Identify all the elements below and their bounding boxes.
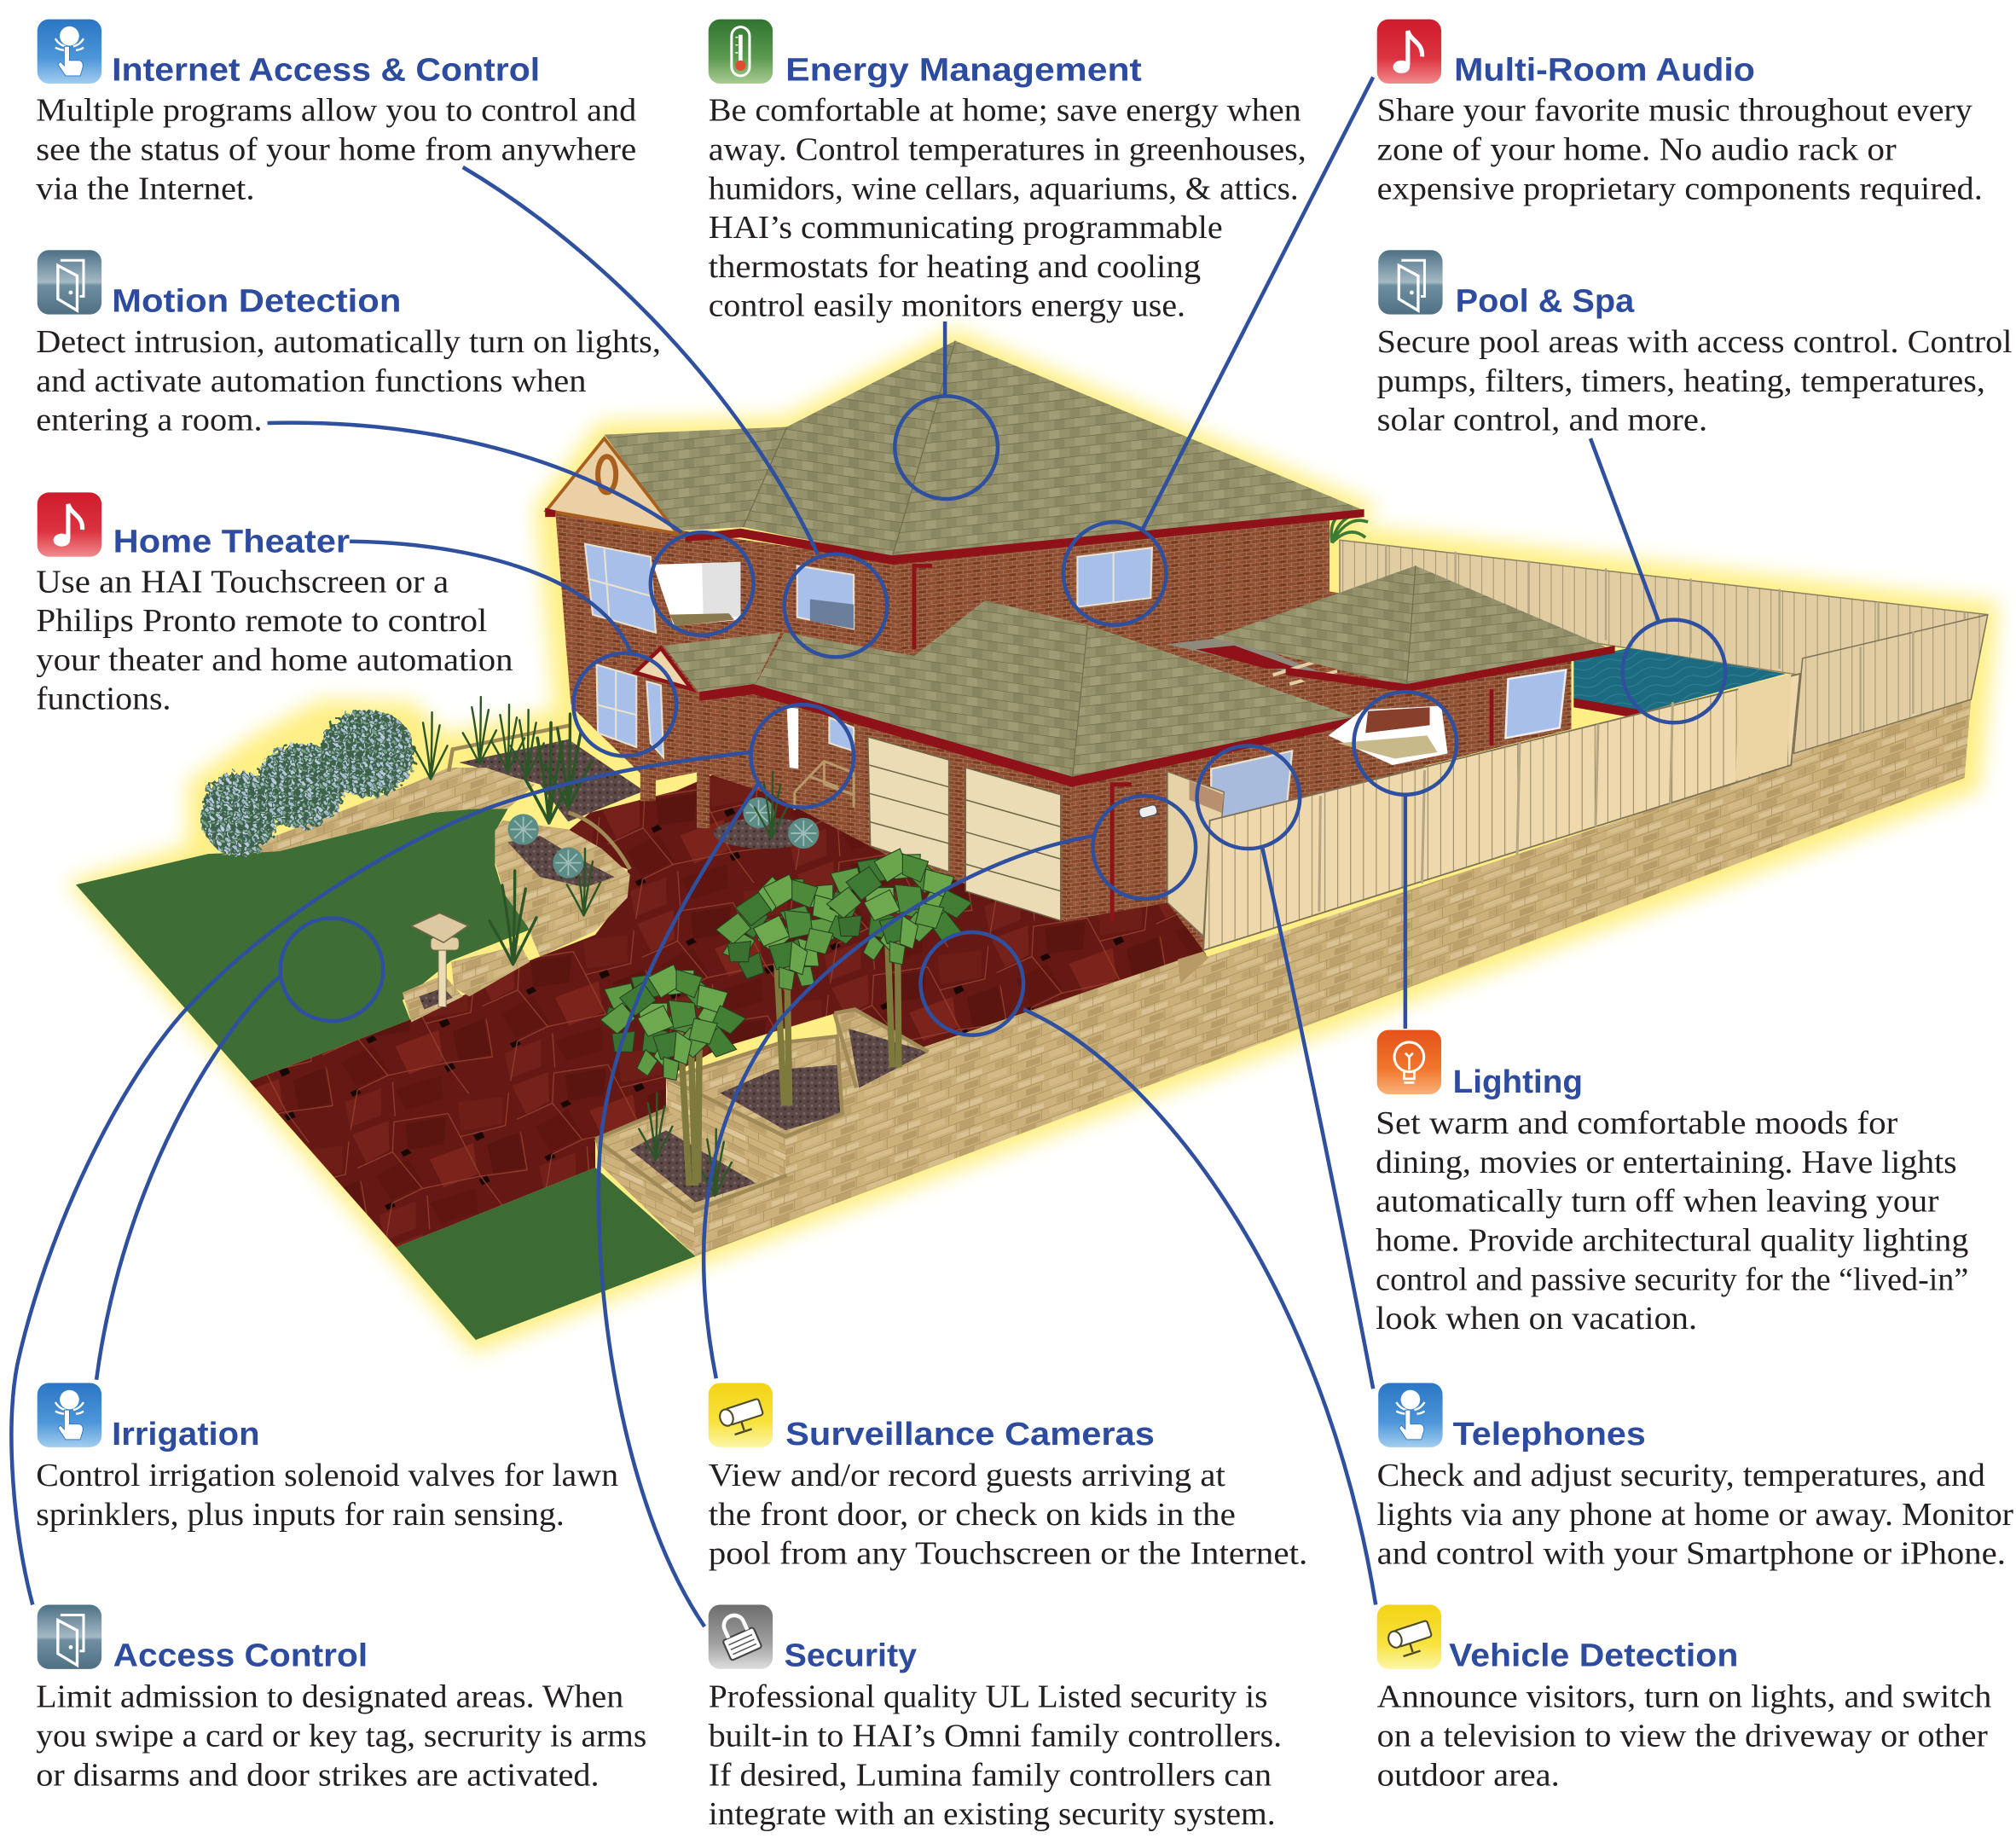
panel: Security bbox=[709, 1605, 1282, 1832]
heading: Telephones bbox=[1453, 1416, 1646, 1452]
text block: entering a room. bbox=[36, 402, 263, 438]
front fence bbox=[1203, 674, 1800, 950]
heading: Irrigation bbox=[112, 1416, 260, 1452]
heading: Surveillance Cameras bbox=[785, 1416, 1155, 1452]
panel: Energy Management bbox=[709, 20, 1306, 324]
heading: Access Control bbox=[113, 1637, 368, 1673]
heading: Motion Detection bbox=[112, 283, 401, 320]
cutaway room upper bbox=[653, 562, 740, 626]
panel: Irrigation bbox=[36, 1383, 618, 1533]
text block: zone of your home. No audio rack or bbox=[1377, 132, 1897, 168]
line: home theater bbox=[350, 542, 631, 654]
text block: Professional quality UL Listed security is bbox=[709, 1679, 1268, 1714]
text block: Use an HAI Touchscreen or a bbox=[36, 564, 449, 600]
ring: vehicle bbox=[920, 932, 1023, 1035]
icon: thermometer bbox=[709, 20, 773, 84]
panel: Surveillance Cameras bbox=[709, 1383, 1307, 1572]
text block: and activate automation functions when bbox=[36, 363, 586, 399]
gate bbox=[1167, 772, 1224, 936]
line: vehicle detection bbox=[1023, 1009, 1376, 1605]
heading: Security bbox=[785, 1637, 918, 1673]
panel: Internet Access and Control bbox=[36, 20, 636, 206]
ring: pool bbox=[1623, 620, 1725, 722]
lower house walls bbox=[565, 643, 1343, 920]
icon: light bulb bbox=[1377, 1030, 1441, 1094]
text block: HAI’s communicating programmable bbox=[709, 210, 1223, 246]
text block: the front door, or check on kids in the bbox=[709, 1497, 1236, 1533]
text block bbox=[36, 93, 636, 206]
ring: irrigation bbox=[281, 918, 383, 1021]
line: telephones bbox=[1263, 849, 1373, 1389]
garden plants bbox=[414, 697, 732, 1196]
text block: humidors, wine cellars, aquariums, & attics. bbox=[709, 171, 1299, 206]
pavilion walls bbox=[1286, 659, 1571, 772]
text block bbox=[709, 1458, 1307, 1572]
text block: solar control, and more. bbox=[1377, 402, 1707, 438]
panel: Motion Detection bbox=[36, 250, 661, 438]
icon: touch hand bbox=[38, 20, 101, 84]
garage doors bbox=[868, 737, 1061, 920]
ring: security and access bbox=[750, 704, 854, 808]
line: motion detection bbox=[268, 423, 681, 532]
text block: via the Internet. bbox=[36, 171, 255, 206]
icon: camera bbox=[709, 1383, 773, 1447]
text block bbox=[36, 324, 661, 438]
heading: Multi-Room Audio bbox=[1454, 51, 1755, 88]
text block: home. Provide architectural quality lighting bbox=[1376, 1222, 1968, 1258]
ring: lighting bbox=[1354, 692, 1457, 795]
icon: touch hand bbox=[1378, 1383, 1443, 1447]
palm behind house bbox=[1331, 514, 1368, 542]
line: energy management bbox=[944, 322, 947, 396]
yellow glow behind illustration bbox=[76, 334, 1993, 1348]
icon: door bbox=[1378, 250, 1443, 315]
pavilion roof bbox=[1213, 565, 1615, 692]
icon: touch hand bbox=[38, 1383, 101, 1447]
text block: automatically turn off when leaving your bbox=[1376, 1184, 1939, 1220]
text block: thermostats for heating and cooling bbox=[709, 249, 1201, 285]
text block: Secure pool areas with access control. Control bbox=[1377, 324, 2012, 360]
line: access control bbox=[11, 752, 750, 1605]
line: security bbox=[599, 783, 759, 1626]
text block: If desired, Lumina family controllers can bbox=[709, 1757, 1272, 1793]
garden lantern bbox=[411, 913, 468, 1006]
text block bbox=[709, 1679, 1282, 1832]
illustration: house and landscaped lot bbox=[76, 341, 1988, 1340]
line: internet access bbox=[463, 167, 818, 554]
palm trees bbox=[579, 823, 986, 1186]
camera bbox=[1138, 804, 1158, 819]
panel: Home Theater bbox=[36, 492, 513, 716]
drain pipes bbox=[914, 565, 1132, 920]
callout lines and rings bbox=[11, 77, 1725, 1626]
bushes bbox=[200, 710, 415, 856]
text block: Limit admission to designated areas. When bbox=[36, 1679, 623, 1714]
heading: Energy Management bbox=[785, 51, 1142, 88]
lawn bbox=[76, 809, 530, 1081]
driveway pavers bbox=[249, 758, 1206, 1247]
panel: Multi-Room Audio bbox=[1377, 20, 1983, 206]
line: multi-room audio bbox=[1142, 77, 1373, 531]
line: lighting bbox=[1404, 795, 1406, 1029]
text block: Check and adjust security, temperatures, and bbox=[1377, 1458, 1985, 1493]
icon: door bbox=[38, 1605, 101, 1669]
front planters bbox=[595, 1009, 929, 1256]
icon: door bbox=[38, 250, 101, 315]
text block: your theater and home automation bbox=[36, 642, 513, 678]
text block bbox=[1377, 1679, 1991, 1793]
right fence panel bbox=[1793, 615, 1988, 753]
icon: music note bbox=[1377, 20, 1441, 84]
ring: internet bbox=[785, 554, 887, 657]
text block: Control irrigation solenoid valves for lawn bbox=[36, 1458, 618, 1493]
text block bbox=[1377, 324, 2012, 438]
text block: pool from any Touchscreen or the Internet. bbox=[709, 1536, 1307, 1572]
panel: Telephones bbox=[1377, 1383, 2013, 1572]
text block: functions. bbox=[36, 681, 171, 716]
text block: Detect intrusion, automatically turn on lights, bbox=[36, 324, 661, 360]
long retaining wall bbox=[595, 699, 1971, 1256]
upper house walls bbox=[555, 512, 1330, 704]
text block: see the status of your home from anywhere bbox=[36, 132, 636, 168]
ring: audio bbox=[1063, 522, 1166, 625]
icon: camera bbox=[1377, 1605, 1441, 1669]
heading: Home Theater bbox=[113, 524, 350, 560]
ring: motion bbox=[651, 532, 753, 635]
rear courtyard skylight bbox=[1087, 625, 1406, 720]
text block: look when on vacation. bbox=[1376, 1301, 1697, 1336]
text block: pumps, filters, timers, heating, temperatures, bbox=[1377, 363, 1985, 399]
text block bbox=[36, 1458, 618, 1533]
text block: Set warm and comfortable moods for bbox=[1376, 1105, 1898, 1141]
text block bbox=[36, 564, 513, 716]
text block bbox=[709, 93, 1306, 324]
front left wall stub bbox=[1178, 952, 1208, 983]
ring: camera bbox=[1093, 796, 1196, 899]
text block: away. Control temperatures in greenhouses, bbox=[709, 132, 1306, 168]
back fence bbox=[1340, 540, 1988, 675]
text block bbox=[36, 1679, 646, 1793]
text block: integrate with an existing security system. bbox=[709, 1796, 1276, 1832]
line: surveillance cameras bbox=[704, 836, 1094, 1378]
heading: Lighting bbox=[1453, 1064, 1583, 1100]
text block: and control with your Smartphone or iPhone. bbox=[1377, 1536, 2006, 1572]
upper windows bbox=[585, 544, 1152, 633]
text block: sprinklers, plus inputs for rain sensing. bbox=[36, 1497, 565, 1533]
text block: built-in to HAI’s Omni family controllers. bbox=[709, 1719, 1282, 1754]
house base walls bbox=[555, 512, 1571, 950]
text block: Multiple programs allow you to control and bbox=[36, 93, 636, 129]
icon: music note bbox=[38, 492, 101, 557]
text block: Announce visitors, turn on lights, and switch bbox=[1377, 1679, 1991, 1714]
panel: Pool and Spa bbox=[1377, 250, 2012, 438]
text block: or disarms and door strikes are activated. bbox=[36, 1757, 600, 1793]
lower windows bbox=[597, 664, 854, 769]
ring: energy bbox=[895, 396, 998, 499]
text block: control easily monitors energy use. bbox=[709, 288, 1185, 324]
lower roof bbox=[635, 600, 1364, 787]
icon: padlock bbox=[709, 1605, 773, 1669]
curved garden planters bbox=[403, 813, 630, 1023]
text block: you swipe a card or key tag, secrurity is arms bbox=[36, 1719, 646, 1754]
text block: Share your favorite music throughout every bbox=[1377, 93, 1973, 129]
main roof bbox=[545, 341, 1364, 565]
text block: lights via any phone at home or away. Monitor bbox=[1377, 1497, 2013, 1533]
text block bbox=[1377, 93, 1983, 206]
heading: Pool & Spa bbox=[1456, 283, 1635, 320]
text block bbox=[1376, 1105, 1968, 1336]
panel: Vehicle Detection bbox=[1377, 1605, 1991, 1793]
side window bbox=[1211, 751, 1292, 823]
cutaway room lower bbox=[1328, 706, 1448, 765]
text block: View and/or record guests arriving at bbox=[709, 1458, 1225, 1493]
text block bbox=[1377, 1458, 2013, 1572]
ring: theater bbox=[573, 653, 676, 756]
pool bbox=[1573, 648, 1786, 717]
heading: Internet Access & Control bbox=[112, 51, 540, 88]
text block: dining, movies or entertaining. Have lights bbox=[1376, 1145, 1957, 1180]
text block: control and passive security for the “lived-in” bbox=[1376, 1261, 1968, 1297]
text block: Philips Pronto remote to control bbox=[36, 603, 487, 639]
text block: expensive proprietary components required. bbox=[1377, 171, 1983, 206]
text block: outdoor area. bbox=[1377, 1757, 1560, 1793]
ring: telephones bbox=[1197, 745, 1300, 849]
panel: Lighting bbox=[1376, 1030, 1968, 1336]
line: pool and spa bbox=[1590, 438, 1659, 621]
text block: Be comfortable at home; save energy when bbox=[709, 93, 1301, 129]
back garden wall bbox=[221, 725, 644, 855]
line: irrigation bbox=[96, 976, 281, 1380]
heading: Vehicle Detection bbox=[1449, 1637, 1738, 1673]
text block: on a television to view the driveway or other bbox=[1377, 1719, 1988, 1754]
porch bench and planting bbox=[714, 762, 854, 849]
front lawn strip bbox=[396, 1168, 696, 1340]
panel: Access Control bbox=[36, 1605, 646, 1793]
